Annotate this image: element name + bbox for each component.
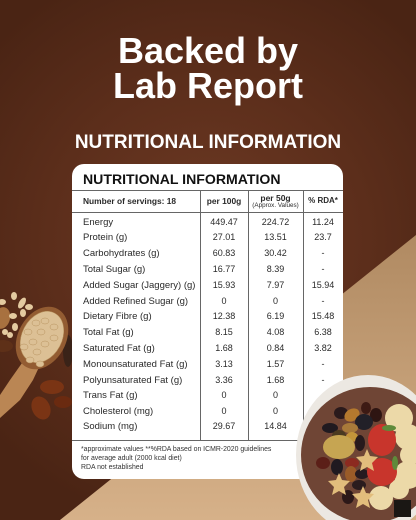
- row: polyunsaturated fat: 1.68: [267, 375, 284, 385]
- panel: nutrition table: [72, 164, 343, 479]
- row: energy: 224.72: [262, 217, 289, 227]
- row: trans fat: Trans Fat (g): [83, 390, 138, 401]
- row: protein: 23.7: [314, 232, 332, 242]
- row: carbohydrates: 60.83: [213, 248, 235, 258]
- title: Backed by: [118, 30, 298, 71]
- row: added sugar: 15.94: [312, 280, 334, 290]
- row: protein: 27.01: [213, 232, 235, 242]
- footnote: *approximate values **%RDA based on ICMR-2020 guidelines: [81, 446, 271, 453]
- illustration: oatmeal bowl: [296, 375, 416, 520]
- row: added sugar: 15.93: [213, 280, 235, 290]
- row: added refined sugar: Added Refined Sugar (g): [83, 296, 188, 307]
- row: energy: [83, 217, 334, 228]
- row: added refined sugar: 0: [221, 296, 226, 306]
- row: total fat: [83, 327, 332, 338]
- row: added sugar: Added Sugar (Jaggery) (g): [83, 280, 195, 291]
- row: total sugar: [83, 264, 324, 275]
- row: dietary fibre: 12.38: [213, 311, 235, 321]
- row: carbohydrates: [83, 248, 324, 259]
- row: protein: 13.51: [264, 232, 287, 242]
- row: protein: Protein (g): [83, 232, 127, 243]
- row: carbohydrates: 30.42: [264, 248, 287, 258]
- row: added sugar: [83, 280, 334, 291]
- row: total sugar: -: [322, 264, 324, 274]
- row: protein: [83, 232, 332, 243]
- table header row: [83, 193, 338, 209]
- row: trans fat: -: [322, 390, 324, 400]
- row: added sugar: 7.97: [267, 280, 284, 290]
- row: cholesterol: 0: [221, 406, 226, 416]
- illustration: wooden spoon with oats: [0, 292, 72, 420]
- oats in spoon: [12, 304, 72, 370]
- row: total sugar: Total Sugar (g): [83, 264, 145, 275]
- almonds and raisins: [0, 305, 73, 423]
- row: monounsaturated fat: -: [322, 359, 324, 369]
- row: total sugar: 16.77: [213, 264, 235, 274]
- row: total fat: Total Fat (g): [83, 327, 134, 338]
- row: sodium: [83, 421, 324, 432]
- row: carbohydrates: -: [322, 248, 324, 258]
- row: sodium: -: [322, 421, 324, 431]
- row: dietary fibre: Dietary Fibre (g): [83, 311, 152, 322]
- row: cholesterol: -: [322, 406, 324, 416]
- row: total fat: 4.08: [267, 327, 284, 337]
- table header row: (Approx. Values): [252, 202, 299, 209]
- row: carbohydrates: Carbohydrates (g): [83, 248, 160, 259]
- table header row: Number of servings: 18: [83, 196, 176, 206]
- row: dietary fibre: [83, 311, 334, 322]
- row: sodium: Sodium (mg): [83, 421, 137, 432]
- banana slices: [369, 404, 416, 510]
- row: total sugar: 8.39: [267, 264, 284, 274]
- row: saturated fat: 0.84: [267, 343, 284, 353]
- star fruit slices: [328, 449, 378, 508]
- row: polyunsaturated fat: -: [322, 375, 324, 385]
- row: added refined sugar: -: [322, 296, 324, 306]
- subheading: NUTRITIONAL INFORMATION: [75, 132, 341, 153]
- row: dietary fibre: 6.19: [267, 311, 284, 321]
- row: saturated fat: Saturated Fat (g): [83, 343, 155, 354]
- logo badge: [394, 500, 411, 517]
- row: added refined sugar: [83, 296, 324, 307]
- table header row: per 100g: [207, 196, 241, 206]
- row: polyunsaturated fat: [83, 375, 324, 386]
- footnote: RDA not established: [81, 464, 143, 471]
- table header row: per 50g: [260, 193, 291, 203]
- row: polyunsaturated fat: 3.36: [215, 375, 233, 385]
- raisins and nuts: [316, 402, 382, 504]
- row: cholesterol: [83, 406, 324, 417]
- row: total fat: 6.38: [314, 327, 332, 337]
- spoon handle and bowl: [0, 298, 79, 418]
- table header row: % RDA*: [308, 196, 338, 205]
- row: trans fat: 0: [221, 390, 226, 400]
- row: monounsaturated fat: 3.13: [215, 359, 233, 369]
- title: Lab Report: [113, 65, 303, 106]
- row: monounsaturated fat: [83, 359, 324, 370]
- strawberries: [367, 424, 398, 486]
- row: total fat: 8.15: [215, 327, 233, 337]
- row: energy: 449.47: [210, 217, 238, 227]
- row: energy: 11.24: [312, 217, 334, 227]
- row: sodium: 29.67: [213, 421, 235, 431]
- row: trans fat: [83, 390, 324, 401]
- row: added refined sugar: 0: [273, 296, 278, 306]
- table heading: NUTRITIONAL INFORMATION: [83, 171, 281, 187]
- row: saturated fat: 1.68: [215, 343, 233, 353]
- row: monounsaturated fat: 1.57: [267, 359, 284, 369]
- footnote: for average adult (2000 kcal diet): [81, 455, 182, 462]
- row: energy: Energy: [83, 217, 113, 228]
- row: trans fat: 0: [273, 390, 278, 400]
- row: cholesterol: Cholesterol (mg): [83, 406, 153, 417]
- row: cholesterol: 0: [273, 406, 278, 416]
- bowl rim: [296, 375, 416, 520]
- row: sodium: 14.84: [264, 421, 287, 431]
- row: saturated fat: 3.82: [314, 343, 332, 353]
- title: [113, 30, 303, 106]
- row: dietary fibre: 15.48: [312, 311, 334, 321]
- row: saturated fat: [83, 343, 332, 354]
- row: polyunsaturated fat: Polyunsaturated Fat (g): [83, 375, 182, 386]
- footnote: [81, 446, 272, 471]
- scattered oats: [0, 292, 33, 338]
- row: monounsaturated fat: Monounsaturated Fat (g): [83, 359, 188, 370]
